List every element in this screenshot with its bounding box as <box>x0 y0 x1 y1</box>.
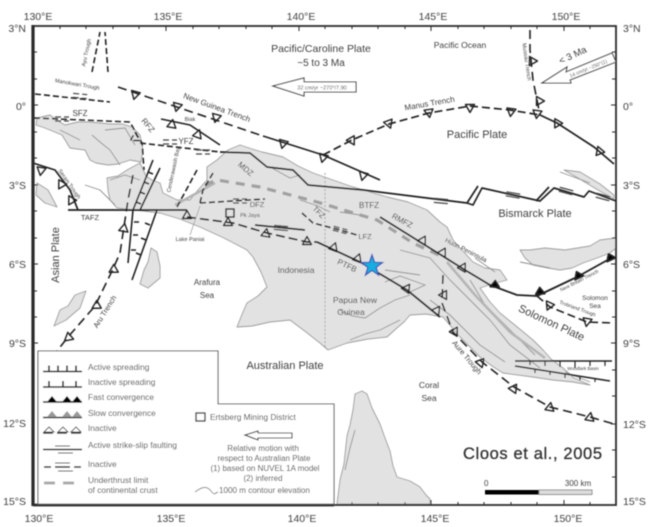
plate and sea labels: New Guinea Trench <box>182 91 252 124</box>
legend text: Active spreading <box>88 362 150 372</box>
right latitude labels: 12°S <box>623 419 646 431</box>
contour legend: 1000 m contour elevation <box>219 486 310 495</box>
legend text: Inactive <box>88 423 117 433</box>
top longitude labels: 150°E <box>552 11 580 23</box>
Ertsberg district square <box>226 209 234 217</box>
Sorong and Manokwari faults <box>34 32 357 235</box>
motion arrow: less than 3 Ma: < 3 Ma <box>557 44 589 67</box>
border: Indonesia and Papua New Guinea <box>324 173 326 347</box>
plate and sea labels: Solomon Plate <box>516 303 586 344</box>
plate and sea labels: Sea <box>421 393 437 403</box>
legend panel <box>38 351 334 504</box>
plate and sea labels: Aru Trench <box>91 294 118 330</box>
right latitude labels: 0° <box>623 101 633 113</box>
plate and sea labels: Sea <box>200 291 215 300</box>
Ertsberg legend: Ertsberg Mining District <box>210 412 296 422</box>
top longitude labels: 135°E <box>154 11 182 23</box>
plate and sea labels: Cenderawasih Bay <box>166 146 182 193</box>
left latitude labels: 9°S <box>9 338 26 350</box>
plate and sea labels: Ayu Trough <box>81 38 93 67</box>
plate and sea labels: Papua New <box>333 295 378 305</box>
bottom longitude labels: 130°E <box>25 513 53 525</box>
Aru Trench <box>57 175 133 351</box>
land: New Guinea main island <box>107 145 590 385</box>
land: Bird's Head peninsula <box>36 115 143 165</box>
Biak thrust <box>161 119 220 145</box>
relative motion text: Relative motion with <box>227 444 299 453</box>
bottom longitude labels: 150°E <box>554 513 582 525</box>
underthrust limit of continental crust <box>205 180 443 257</box>
bottom longitude labels: 140°E <box>288 513 316 525</box>
Seram Trough <box>33 163 78 210</box>
New Guinea Trench <box>118 87 380 182</box>
plate and sea labels: Woodlark Basin <box>567 366 599 371</box>
left latitude labels: 0° <box>16 101 26 113</box>
motion arrow: less than 3 Ma: 14 cm/yr ~250°(1) <box>569 59 609 79</box>
plate and sea labels: MDZ <box>236 160 255 178</box>
land: New Britain <box>520 238 616 270</box>
Lake Paniai leader <box>190 206 200 235</box>
plate and sea labels: Manus Trench <box>404 95 455 112</box>
Aure Trough <box>438 275 614 424</box>
citation: Cloos et al., 2005 <box>463 445 602 463</box>
plate and sea labels: YFZ <box>178 137 194 146</box>
plate and sea labels: Manokwari Trough <box>54 78 100 92</box>
Ramu-Markham fault and New Britain Trench <box>380 217 615 296</box>
bottom longitude labels <box>25 513 582 525</box>
plate and sea labels: Bismarck Plate <box>498 208 572 220</box>
plate and sea labels: Pacific/Caroline Plate <box>271 43 371 55</box>
plate and sea labels: BTFZ <box>359 201 379 210</box>
plate and sea labels: Asian Plate <box>50 227 62 283</box>
Tarera-Aiduna fault zone <box>68 209 187 211</box>
plate and sea labels: TFZ <box>311 204 327 221</box>
star: Ertsberg location <box>362 255 382 275</box>
relative motion arrow <box>245 431 292 440</box>
legend text: Slow convergence <box>88 408 156 418</box>
plate and sea labels: PTFB <box>336 257 358 274</box>
Woodlark spreading <box>515 361 612 382</box>
top longitude labels: 140°E <box>287 11 315 23</box>
land: Tanimbar <box>54 291 86 326</box>
plate and sea labels: Pacific Plate <box>447 129 507 141</box>
left latitude labels: 3°S <box>9 180 26 192</box>
gray highland strip <box>175 183 545 358</box>
land: Cape York, Australia <box>337 391 430 504</box>
land: New Ireland <box>564 170 614 199</box>
motion arrow: Pacific/Caroline plate: 32 cm/yr ~270°/7.90 <box>297 86 347 92</box>
land: Seram <box>36 183 57 207</box>
relative motion text: respect to Australian Plate <box>218 454 311 463</box>
plate and sea labels: Aure Trough <box>450 339 484 376</box>
left latitude labels: 3°N <box>8 23 26 35</box>
Bismarck Sea fault <box>220 152 616 205</box>
Mussau Trench <box>530 30 544 115</box>
plate and sea labels: Biak <box>185 117 196 123</box>
South thrust front and PTFB <box>182 210 443 317</box>
legend text: Inactive <box>88 459 117 469</box>
plate and sea labels: TAFZ <box>81 213 100 222</box>
legend text <box>88 362 177 495</box>
plate and sea labels: LFZ <box>358 232 372 241</box>
legend symbols <box>43 366 82 483</box>
plate and sea labels: Pacific Ocean <box>434 40 486 50</box>
plate and sea labels: Lake Paniai <box>176 237 204 243</box>
legend text: Inactive spreading <box>88 377 156 387</box>
scale bar: 0 <box>484 479 489 488</box>
bottom longitude labels: 135°E <box>157 513 185 525</box>
right latitude labels <box>623 23 646 508</box>
plate and sea labels: Coral <box>419 380 439 390</box>
plate and sea labels: Arafura <box>194 278 221 287</box>
land masses <box>36 115 616 504</box>
plate and sea labels <box>50 38 608 403</box>
land: Aru Islands <box>140 248 160 288</box>
right latitude labels: 3°N <box>623 23 641 35</box>
contour lines <box>60 128 590 470</box>
relative motion text: (2) inferred <box>243 474 283 483</box>
plate and sea labels: DFZ <box>250 200 265 209</box>
motion arrow: less than 3 Ma <box>542 44 616 83</box>
motion arrow: Pacific/Caroline plate <box>273 78 356 96</box>
legend text: Underthrust limit <box>88 475 149 485</box>
Manus Trench <box>323 104 614 164</box>
plate and sea labels: RFZ <box>139 117 156 134</box>
plate and sea labels: RMFZ <box>390 212 414 230</box>
left latitude labels <box>3 23 26 508</box>
left latitude labels: 15°S <box>3 496 26 508</box>
Aru spreading lines <box>128 160 160 280</box>
top longitude labels: 130°E <box>24 11 52 23</box>
right latitude labels: 3°S <box>623 180 640 192</box>
left latitude labels: 6°S <box>9 259 26 271</box>
top longitude labels <box>24 11 580 23</box>
plate and sea labels: New Britain Trench <box>559 269 600 293</box>
faults and trenches <box>33 30 616 424</box>
plate and sea labels: Trobriand Trough <box>558 300 597 318</box>
left latitude labels: 12°S <box>3 418 26 430</box>
plate and sea labels: Pk Jaya <box>240 213 261 219</box>
plate and sea labels: Mussau Trench <box>520 43 532 81</box>
plate and sea labels: Guinea <box>337 307 365 317</box>
legend text: Fast convergence <box>88 392 154 402</box>
relative motion text <box>210 444 320 483</box>
Trobriand Trough <box>537 296 613 327</box>
top longitude labels: 145°E <box>419 11 447 23</box>
plate and sea labels: ~5 to 3 Ma <box>297 58 345 69</box>
right latitude labels: 6°S <box>623 259 640 271</box>
legend text: Active strike-slip faulting <box>88 440 177 450</box>
scale bar <box>484 479 592 494</box>
legend text: of continental crust <box>88 485 158 495</box>
plate and sea labels: Indonesia <box>278 265 315 275</box>
plate and sea labels: Solomon <box>582 295 608 302</box>
relative motion text: (1) based on NUVEL 1A model <box>210 464 320 473</box>
plate and sea labels: Huon Peninsula <box>444 237 488 264</box>
right latitude labels: 15°S <box>623 496 646 508</box>
bottom longitude labels: 145°E <box>421 513 449 525</box>
plate and sea labels: Sea <box>589 303 601 310</box>
plate and sea labels: Seram Trough <box>56 168 81 200</box>
right latitude labels: 9°S <box>623 338 640 350</box>
plate and sea labels: Australian Plate <box>246 360 324 372</box>
plate and sea labels: SFZ <box>72 109 88 118</box>
scale bar: 300 km <box>565 479 591 488</box>
